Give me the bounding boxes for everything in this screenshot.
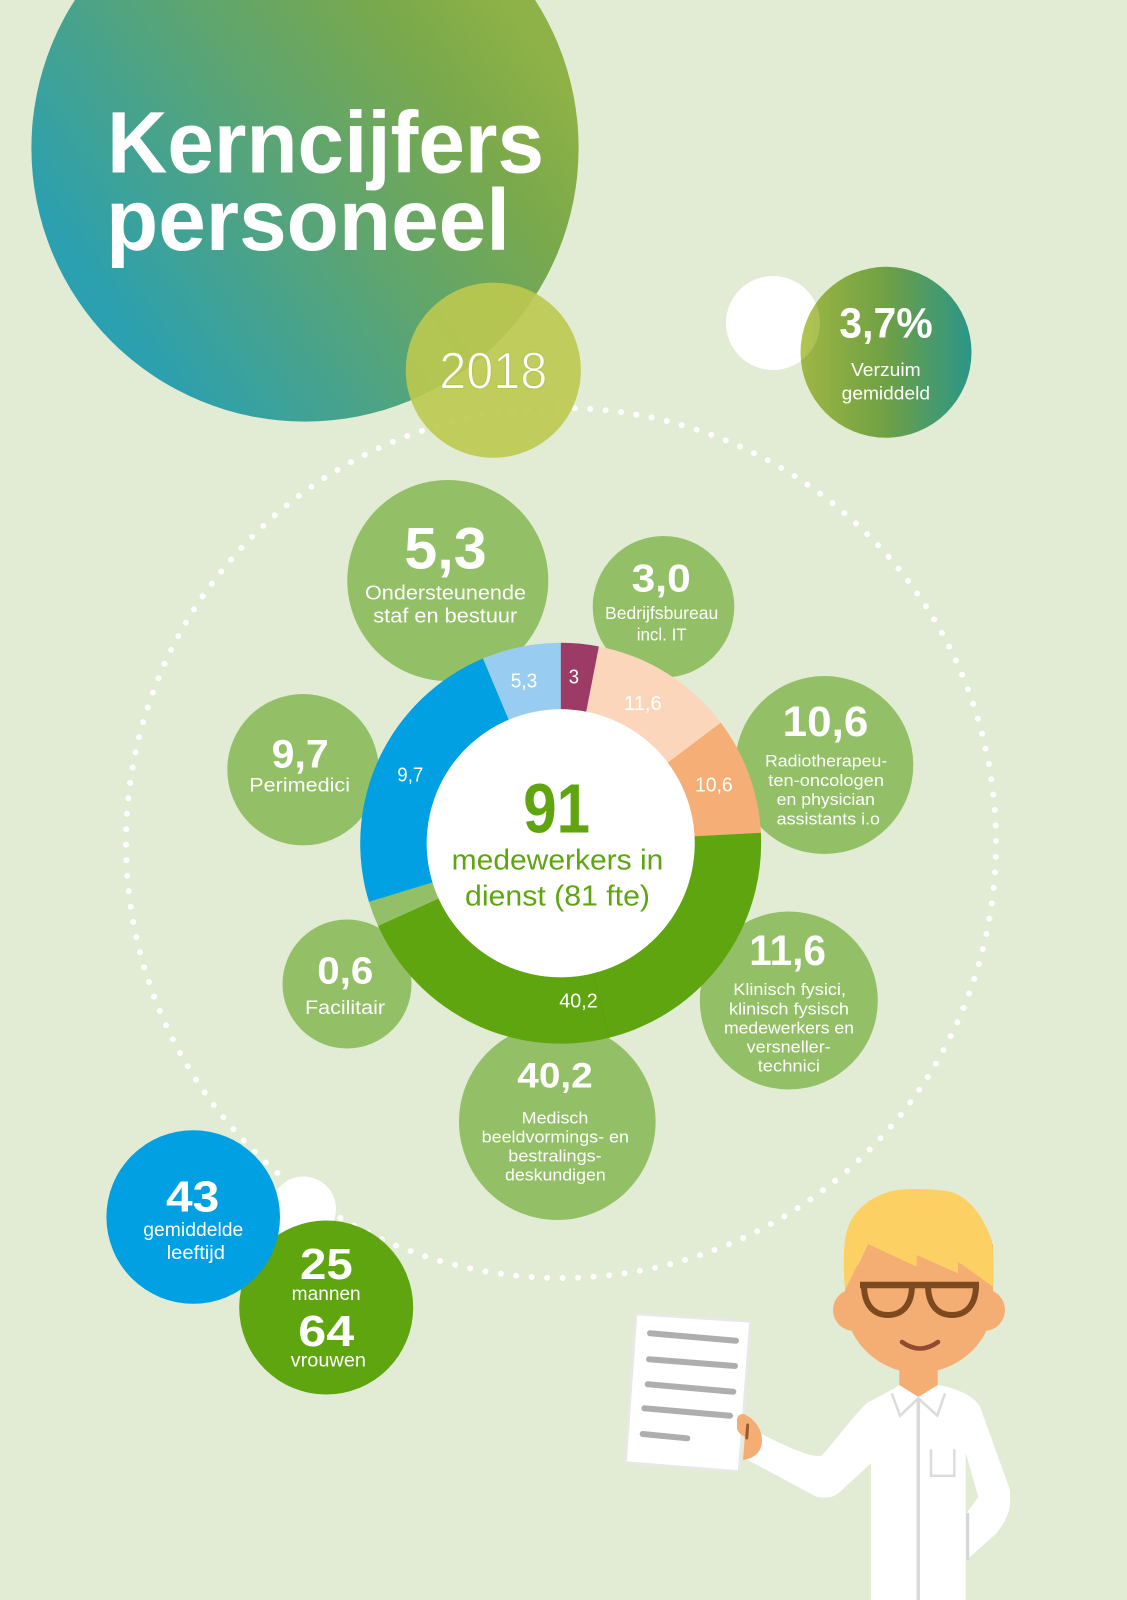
bubble: bedrijfsbureau	[593, 536, 734, 678]
donut centre total: dienst (81 fte)	[465, 881, 650, 913]
bubble: facilitair: 0,6	[317, 950, 373, 992]
bubble: klinisch fysici: versneller-	[747, 1038, 831, 1056]
gender badge: 25	[300, 1240, 353, 1289]
segment values: 9,7	[397, 764, 423, 787]
illustration: doctor with document	[626, 1189, 1010, 1600]
segment: 0,6	[369, 882, 439, 926]
bubble: klinisch fysici	[700, 912, 878, 1090]
absence badge	[800, 267, 972, 438]
bubble: radiotherapeuten: Radiotherapeu-	[765, 753, 887, 771]
title	[106, 95, 544, 269]
year badge	[406, 283, 581, 458]
bubble: ondersteunende staf	[347, 480, 548, 681]
bubble: bedrijfsbureau: Bedrijfsbureau	[605, 603, 718, 623]
absence label: Verzuim	[851, 359, 921, 380]
age badge	[106, 1130, 280, 1304]
bubble: bedrijfsbureau: 3,0	[632, 558, 691, 601]
age badge: 43	[166, 1173, 219, 1222]
bubble: facilitair	[282, 920, 412, 1048]
title: Kerncijfers	[107, 95, 544, 192]
bubble: medisch beeldvormings- en bestralingsdeskundigen	[459, 1023, 656, 1220]
absence label	[842, 359, 930, 404]
bubble: medisch beeldvormings- en bestralingsdeskundigen: Medisch	[522, 1109, 588, 1127]
gender badge: vrouwen	[291, 1351, 366, 1372]
bubble: klinisch fysici: Klinisch fysici,	[733, 981, 846, 999]
doctor body and coat	[748, 1370, 1010, 1600]
bubble: klinisch fysici: 11,6	[749, 927, 826, 975]
segment: 10,6	[668, 723, 761, 836]
segment: 11,6	[586, 646, 721, 763]
segment values: 3	[569, 665, 579, 688]
bubble: klinisch fysici: klinisch fysisch	[729, 1000, 849, 1018]
gender badge: 64	[298, 1307, 355, 1356]
bubble: klinisch fysici: technici	[758, 1058, 820, 1076]
segment values: 11,6	[624, 692, 662, 715]
bubble: radiotherapeuten: assistants i.o	[777, 810, 880, 828]
decorative white circle behind age badges	[271, 1176, 336, 1242]
bubble: radiotherapeuten: ten-oncologen	[768, 772, 884, 790]
gender badge	[239, 1220, 413, 1394]
donut chart	[360, 643, 761, 1044]
hand	[737, 1414, 762, 1460]
bubble: perimedici: 9,7	[272, 732, 329, 776]
bubble: perimedici: Perimedici	[249, 776, 350, 797]
segment: 5,3	[483, 643, 561, 720]
segment values: 40,2	[559, 990, 598, 1013]
bubble: facilitair: Facilitair	[305, 997, 386, 1019]
gender badge: mannen	[292, 1284, 361, 1305]
year badge: 2018	[439, 342, 547, 400]
document	[626, 1314, 750, 1472]
bubble: medisch beeldvormings- en bestralingsdeskundigen: beeldvormings- en	[482, 1128, 629, 1146]
segment: 9,7	[360, 658, 509, 902]
bubble: medisch beeldvormings- en bestralingsdeskundigen: deskundigen	[505, 1167, 606, 1185]
title: personeel	[106, 172, 510, 269]
absence figure: 3,7%	[839, 299, 933, 347]
bubble: ondersteunende staf: Ondersteunende	[365, 582, 526, 604]
bubble: bedrijfsbureau: incl. IT	[637, 625, 687, 645]
decorative white circle	[726, 276, 820, 370]
age badge: gemiddelde	[143, 1220, 243, 1241]
segment: 40,2	[378, 833, 761, 1044]
age badge: leeftijd	[167, 1243, 225, 1264]
bubble: radiotherapeuten: en physician	[777, 791, 875, 809]
bubble: perimedici	[227, 694, 379, 845]
bubble: radiotherapeuten: 10,6	[783, 698, 868, 746]
donut centre total	[427, 709, 695, 977]
absence label: gemiddeld	[842, 382, 930, 404]
bubble: klinisch fysici: medewerkers en	[724, 1019, 854, 1037]
donut centre total: medewerkers in	[452, 844, 663, 876]
segment values: 5,3	[511, 670, 537, 693]
bubble: medisch beeldvormings- en bestralingsdeskundigen: bestralings-	[508, 1148, 602, 1166]
bubble: ondersteunende staf: staf en bestuur	[373, 605, 518, 627]
doctor head	[833, 1189, 1005, 1373]
absence stat	[726, 267, 972, 438]
bubble: ondersteunende staf: 5,3	[404, 516, 487, 581]
segment: 3 bedrijfsbureau	[561, 643, 599, 712]
bubble: medisch beeldvormings- en bestralingsdeskundigen: 40,2	[517, 1056, 593, 1095]
segment values	[397, 665, 733, 1013]
segment values: 10,6	[695, 774, 733, 797]
title circle with heading	[31, 0, 579, 422]
bubble: radiotherapeuten	[735, 676, 913, 854]
donut centre total: 91	[523, 769, 590, 847]
